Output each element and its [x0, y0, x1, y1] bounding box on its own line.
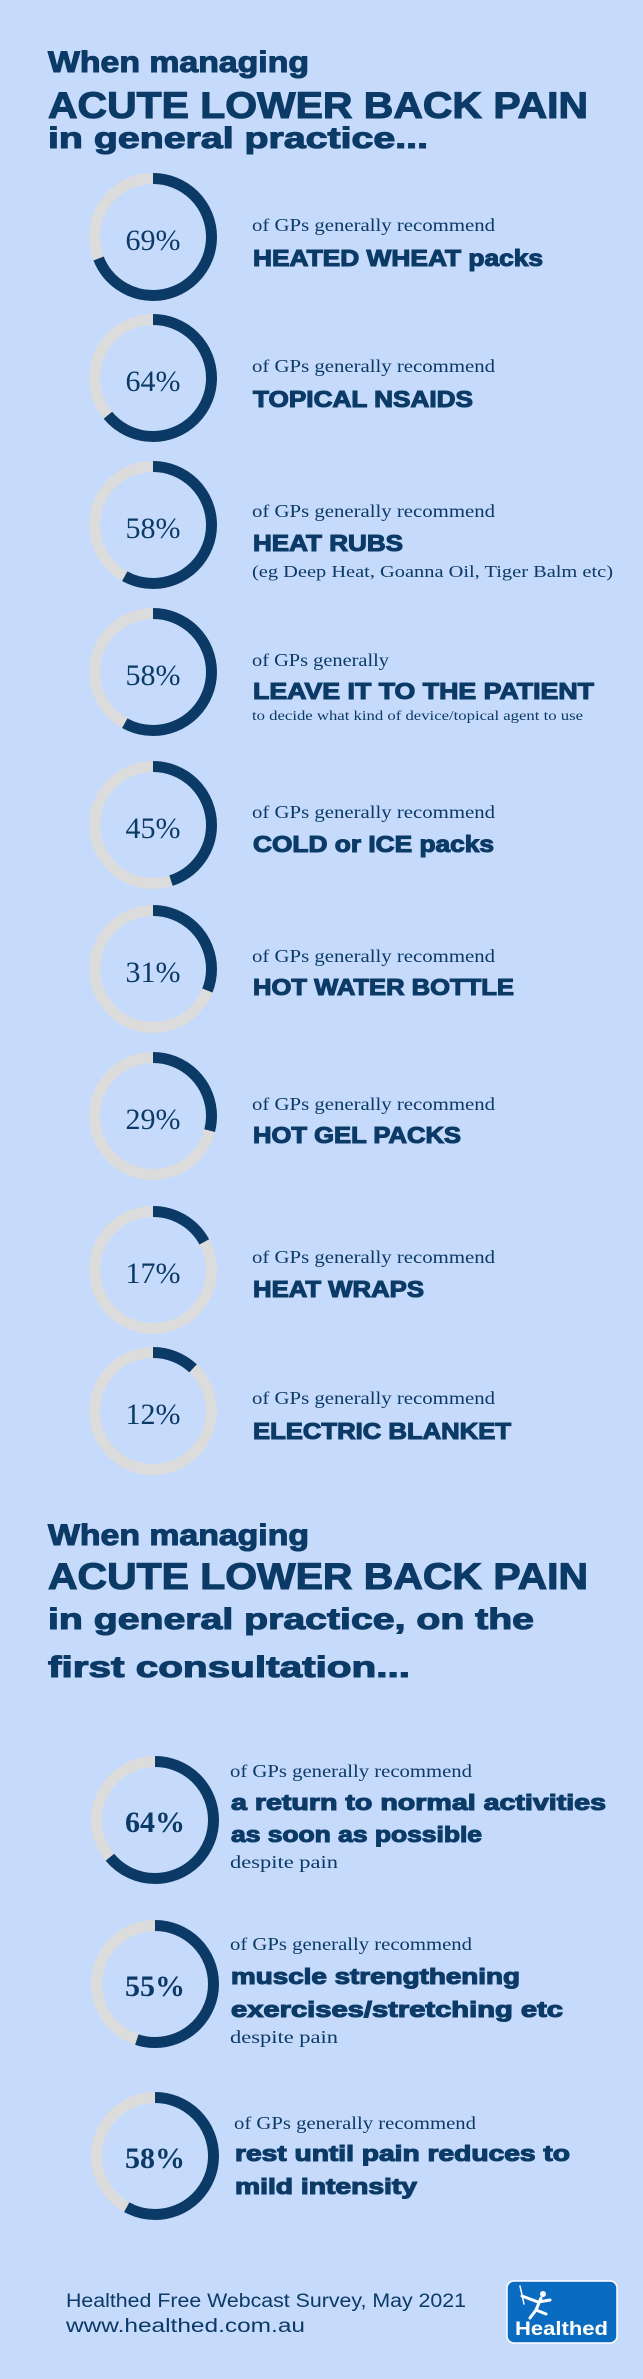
item: 29% hot gel packs: HOT GEL PACKS — [253, 1122, 461, 1148]
item: 55% muscle strengthening: of GPs generally recommend — [230, 1934, 472, 1954]
donut: 31%: 31% — [126, 956, 180, 989]
title: section 2: in general practice, on the — [48, 1603, 534, 1636]
item: 17% heat wraps: of GPs generally recommend — [252, 1247, 495, 1267]
footer: source text — [65, 2291, 466, 2337]
donut: 17% — [94, 1212, 212, 1328]
item: 31% hot water bottle: HOT WATER BOTTLE — [253, 974, 514, 1000]
item: 58% leave it to the patient: to decide what kind of device/topical agent to use — [252, 709, 583, 724]
donut: 64%: 64% — [125, 1806, 185, 1839]
donut: 64%: 64% — [126, 365, 180, 398]
footer: source text: Healthed Free Webcast Survey, May 2021 — [66, 2291, 466, 2312]
donut: 55% — [96, 1926, 214, 2042]
item: 64% topical nsaids: TOPICAL NSAIDS — [253, 386, 473, 412]
logo: Healthed — [507, 2281, 617, 2343]
donut: 58% — [94, 466, 212, 584]
donut: 58% — [94, 614, 212, 730]
item: 12% electric blanket: ELECTRIC BLANKET — [253, 1418, 511, 1444]
item: 58% leave it to the patient — [94, 614, 594, 730]
item: 17% heat wraps: HEAT WRAPS — [253, 1276, 424, 1302]
item: 58% rest until pain reduces: of GPs generally recommend — [234, 2113, 476, 2133]
item: 58% rest until pain reduces: rest until pain reduces to — [235, 2141, 570, 2166]
item: 64% return to normal activities — [96, 1761, 606, 1878]
item: 64% return to normal activities: as soon as possible — [231, 1822, 482, 1847]
donut: 64% — [94, 320, 212, 436]
item: 69% heated wheat packs: of GPs generally recommend — [252, 215, 495, 235]
item: 55% muscle strengthening — [96, 1926, 563, 2047]
item: 58% rest until pain reduces: mild intensity — [235, 2174, 418, 2199]
item: 55% muscle strengthening: despite pain — [230, 2027, 338, 2047]
donut: 58%: 58% — [126, 512, 180, 545]
title: section 2: When managing — [48, 1519, 309, 1552]
donut: 58%: 58% — [125, 2142, 185, 2175]
donut: 64% — [96, 1762, 214, 1878]
item: 64% return to normal activities: of GPs generally recommend — [230, 1761, 472, 1781]
donut: 12%: 12% — [126, 1398, 180, 1431]
item: 45% cold or ice packs — [94, 766, 495, 884]
donut: 69%: 69% — [126, 224, 180, 257]
item: 12% electric blanket — [94, 1352, 511, 1470]
icon: running figure — [520, 2286, 550, 2318]
donut: 12% — [94, 1352, 212, 1470]
donut: 58% — [96, 2098, 214, 2214]
title: section 2: first consultation... — [48, 1651, 410, 1684]
item: 31% hot water bottle — [94, 910, 514, 1028]
title: section 1: When managing — [48, 46, 309, 79]
title: section 2 — [48, 1519, 588, 1684]
donut: 29%: 29% — [126, 1103, 180, 1136]
donut: 55%: 55% — [125, 1970, 185, 2003]
item: 58% heat rubs — [94, 466, 613, 584]
item: 58% leave it to the patient: of GPs generally — [252, 650, 389, 670]
footer: source text: www.healthed.com.au — [65, 2316, 305, 2337]
item: 29% hot gel packs — [94, 1058, 495, 1174]
title: section 1 — [48, 46, 588, 155]
item: 55% muscle strengthening: muscle strengthening — [231, 1964, 520, 1989]
item: 17% heat wraps — [94, 1212, 495, 1328]
item: 69% heated wheat packs: HEATED WHEAT packs — [253, 245, 543, 271]
item: 69% heated wheat packs — [94, 178, 543, 296]
item: 55% muscle strengthening: exercises/stretching etc — [231, 1997, 563, 2022]
donut: 45%: 45% — [126, 812, 180, 845]
item: 64% topical nsaids — [94, 320, 495, 436]
title: section 2: ACUTE LOWER BACK PAIN — [48, 1556, 588, 1597]
donut: 69% — [94, 178, 212, 296]
item: 58% heat rubs: of GPs generally recommend — [252, 501, 495, 521]
item: 29% hot gel packs: of GPs generally recommend — [252, 1094, 495, 1114]
item: 45% cold or ice packs: of GPs generally recommend — [252, 802, 495, 822]
item: 58% leave it to the patient: LEAVE IT TO THE PATIENT — [253, 678, 594, 704]
donut: 31% — [94, 910, 212, 1028]
item: 58% heat rubs: HEAT RUBS — [253, 530, 403, 556]
item: 58% heat rubs: (eg Deep Heat, Goanna Oil, Tiger Balm etc) — [252, 562, 613, 581]
logo: Healthed: Healthed — [515, 2319, 608, 2340]
title: section 1: in general practice... — [48, 122, 428, 155]
item: 31% hot water bottle: of GPs generally recommend — [252, 946, 495, 966]
donut: 17%: 17% — [126, 1257, 180, 1290]
item: 64% return to normal activities: despite pain — [230, 1852, 338, 1872]
item: 64% return to normal activities: a return to normal activities — [231, 1790, 606, 1815]
donut: 45% — [94, 766, 212, 884]
donut: 29% — [94, 1058, 212, 1174]
title: section 1: ACUTE LOWER BACK PAIN — [48, 85, 588, 126]
item: 45% cold or ice packs: COLD or ICE packs — [253, 831, 494, 857]
item: 64% topical nsaids: of GPs generally recommend — [252, 356, 495, 376]
item: 58% rest until pain reduces — [96, 2098, 570, 2214]
item: 12% electric blanket: of GPs generally recommend — [252, 1388, 495, 1408]
donut: 58%: 58% — [126, 659, 180, 692]
